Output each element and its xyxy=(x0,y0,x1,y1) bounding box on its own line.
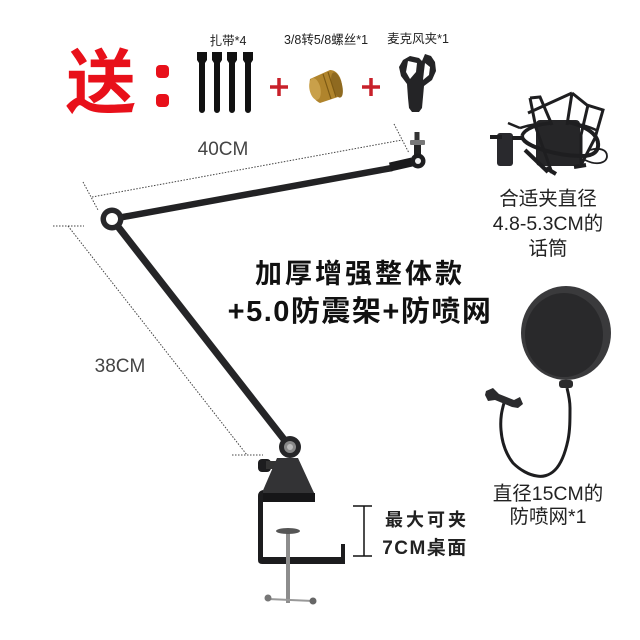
label: cable straps: 扎带*4 xyxy=(210,34,246,48)
label: shock mount: 话筒 xyxy=(528,238,568,260)
label: clamp capacity: 最大可夹 xyxy=(385,510,469,530)
boom arm xyxy=(100,132,426,458)
icon: plus one xyxy=(270,78,288,96)
label: shock mount: 合适夹直径 xyxy=(499,188,597,210)
icon: pop filter xyxy=(485,286,611,476)
label: mic clip: 麦克风夹*1 xyxy=(387,32,449,46)
icon: brass adapter screw xyxy=(307,70,345,103)
icon: mic clip xyxy=(399,54,436,112)
label: shock mount: 4.8-5.3CM的 xyxy=(493,213,603,235)
heading: gift label: 送 xyxy=(66,44,136,122)
label: pop filter: 直径15CM的 xyxy=(493,483,603,505)
icon: plus two xyxy=(362,78,380,96)
title: +5.0防震架+防喷网 xyxy=(228,295,492,328)
dimension: clamp opening bracket xyxy=(353,506,372,556)
label: pop filter: 防喷网*1 xyxy=(510,506,586,528)
label: clamp capacity xyxy=(382,510,469,559)
desk clamp xyxy=(258,458,345,604)
label: adapter screw: 3/8转5/8螺丝*1 xyxy=(284,32,368,47)
dimension: 38cm dotted line xyxy=(53,226,263,455)
label: pop filter xyxy=(493,483,603,528)
dimension: 40cm dotted line xyxy=(83,124,409,210)
label: shock mount xyxy=(493,188,603,260)
heading: gift label xyxy=(66,44,169,122)
title xyxy=(228,259,492,328)
label: 38CM: 38CM xyxy=(95,356,145,377)
icon: cable straps xyxy=(197,52,253,113)
label: 40CM: 40CM xyxy=(198,139,248,160)
icon: shock mount xyxy=(490,93,607,174)
title: 加厚增强整体款 xyxy=(255,259,465,289)
label: clamp capacity: 7CM桌面 xyxy=(382,537,468,559)
